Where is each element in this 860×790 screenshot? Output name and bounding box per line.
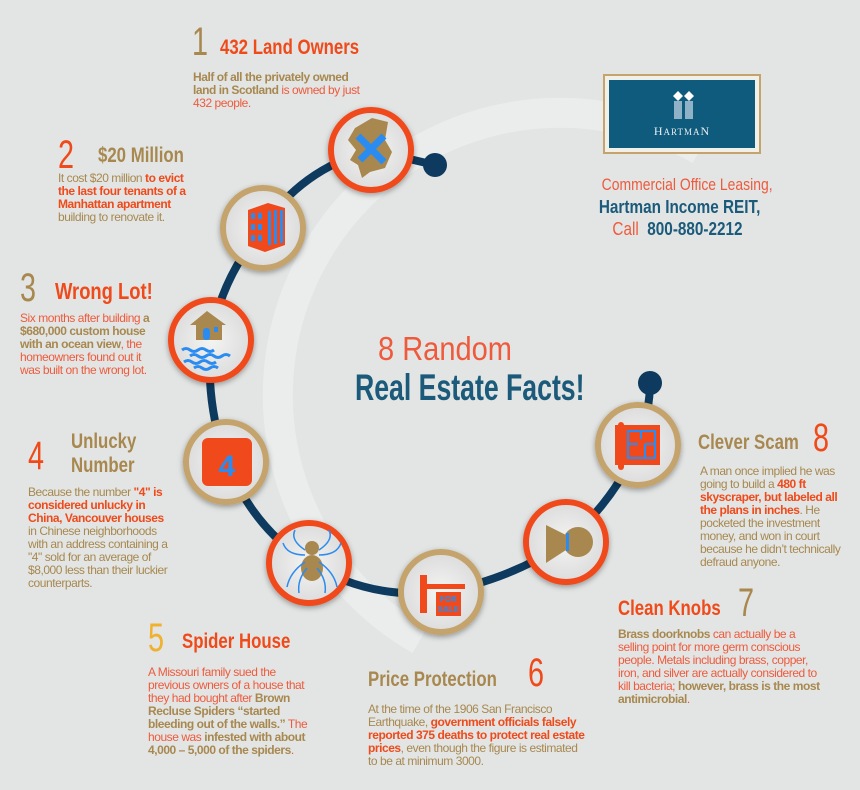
- fact 3: Wrong Lot!: [55, 278, 153, 304]
- fact 7: [618, 581, 820, 706]
- fact 1: 1: [192, 20, 208, 64]
- fact 1: [192, 20, 360, 110]
- fact 8: A man once implied he was going to build a 480 ft skyscraper, but labeled all the plans in inches. He pocketed the investment money, and won in court because he didn’t technically defraud anyone.: [700, 464, 840, 569]
- fact 6: [368, 651, 585, 768]
- fact 4: Number: [71, 454, 134, 477]
- fact 2: It cost $20 million to evict the last four tenants of a Manhattan apartment building to renovate it.: [58, 171, 186, 224]
- main title: Real Estate Facts!: [355, 367, 584, 408]
- icon circle 6: for sale sign: SALE: [438, 605, 460, 614]
- fact 6: 6: [528, 651, 544, 695]
- icon circle 6: for sale sign: [401, 552, 481, 632]
- fact 3: [20, 266, 153, 377]
- fact 3: Six months after building a $680,000 custom house with an ocean view, the homeowners found out it was built on the wrong lot.: [20, 311, 149, 377]
- fact 3: 3: [20, 266, 36, 310]
- contact text: Commercial Office Leasing,: [602, 175, 773, 194]
- fact 5: 5: [148, 616, 164, 660]
- fact 6: At the time of the 1906 San Francisco Earthquake, government officials falsely reported 375 deaths to protect real estate prices, even though the figure is estimated to be at minimum 3000.: [368, 702, 585, 768]
- icon circle 6: for sale sign: FOR: [440, 595, 457, 604]
- icon circle 5: spider: [269, 523, 349, 603]
- main title: 8 Random: [378, 330, 512, 367]
- icon circle 3: house & water: [171, 300, 251, 380]
- fact 8: [698, 416, 841, 569]
- main title: [355, 330, 584, 408]
- fact 4: Unlucky: [71, 430, 136, 453]
- navy path: [210, 150, 662, 593]
- icon circle 4: number 4: 4: [219, 450, 236, 483]
- contact text: [599, 175, 773, 239]
- fact 6: Price Protection: [368, 668, 497, 691]
- fact 2: $20 Million: [98, 144, 184, 167]
- fact 4: [28, 430, 168, 590]
- fact 4: 4: [28, 434, 44, 478]
- icon circle 1: Scotland: [331, 110, 411, 190]
- fact 7: 7: [738, 581, 754, 625]
- logo: Hartman: [603, 74, 761, 154]
- logo: Hartman: HARTMAN: [654, 124, 710, 138]
- icon circle 2: building: [223, 188, 303, 268]
- fact 5: A Missouri family sued the previous owners of a house that they had bought after Brown Recluse Spiders “started bleeding out of the walls.” The house was infested with about 4,000 – 5,000 of the spiders.: [148, 665, 307, 757]
- fact 5: Spider House: [182, 630, 290, 653]
- icon circle 7: doorknob: [526, 502, 606, 582]
- fact 5: [148, 616, 308, 757]
- fact 4: Because the number "4" is considered unlucky in China, Vancouver houses in Chinese neighborhoods with an address containing a "4" sold for an average of $8,000 less than their luckier counterparts.: [28, 485, 168, 590]
- fact 7: Clean Knobs: [618, 597, 721, 620]
- icon circle 4: number 4: [186, 422, 266, 502]
- contact text: Hartman Income REIT,: [599, 197, 760, 217]
- icon circle 8: blueprint: [598, 405, 678, 485]
- fact 2: [58, 133, 186, 224]
- fact 8: Clever Scam: [698, 431, 799, 454]
- fact 1: 432 Land Owners: [220, 36, 359, 59]
- fact 7: Brass doorknobs can actually be a selling point for more germ conscious people. Metals including brass, copper, iron, and silver are actually considered to kill bacteria; however, brass is the most antimicrobial.: [618, 627, 820, 706]
- fact 8: 8: [813, 416, 829, 460]
- contact text: Call 800-880-2212: [612, 219, 743, 239]
- fact 2: 2: [58, 133, 74, 177]
- fact 1: Half of all the privately owned land in Scotland is owned by just 432 people.: [193, 70, 360, 110]
